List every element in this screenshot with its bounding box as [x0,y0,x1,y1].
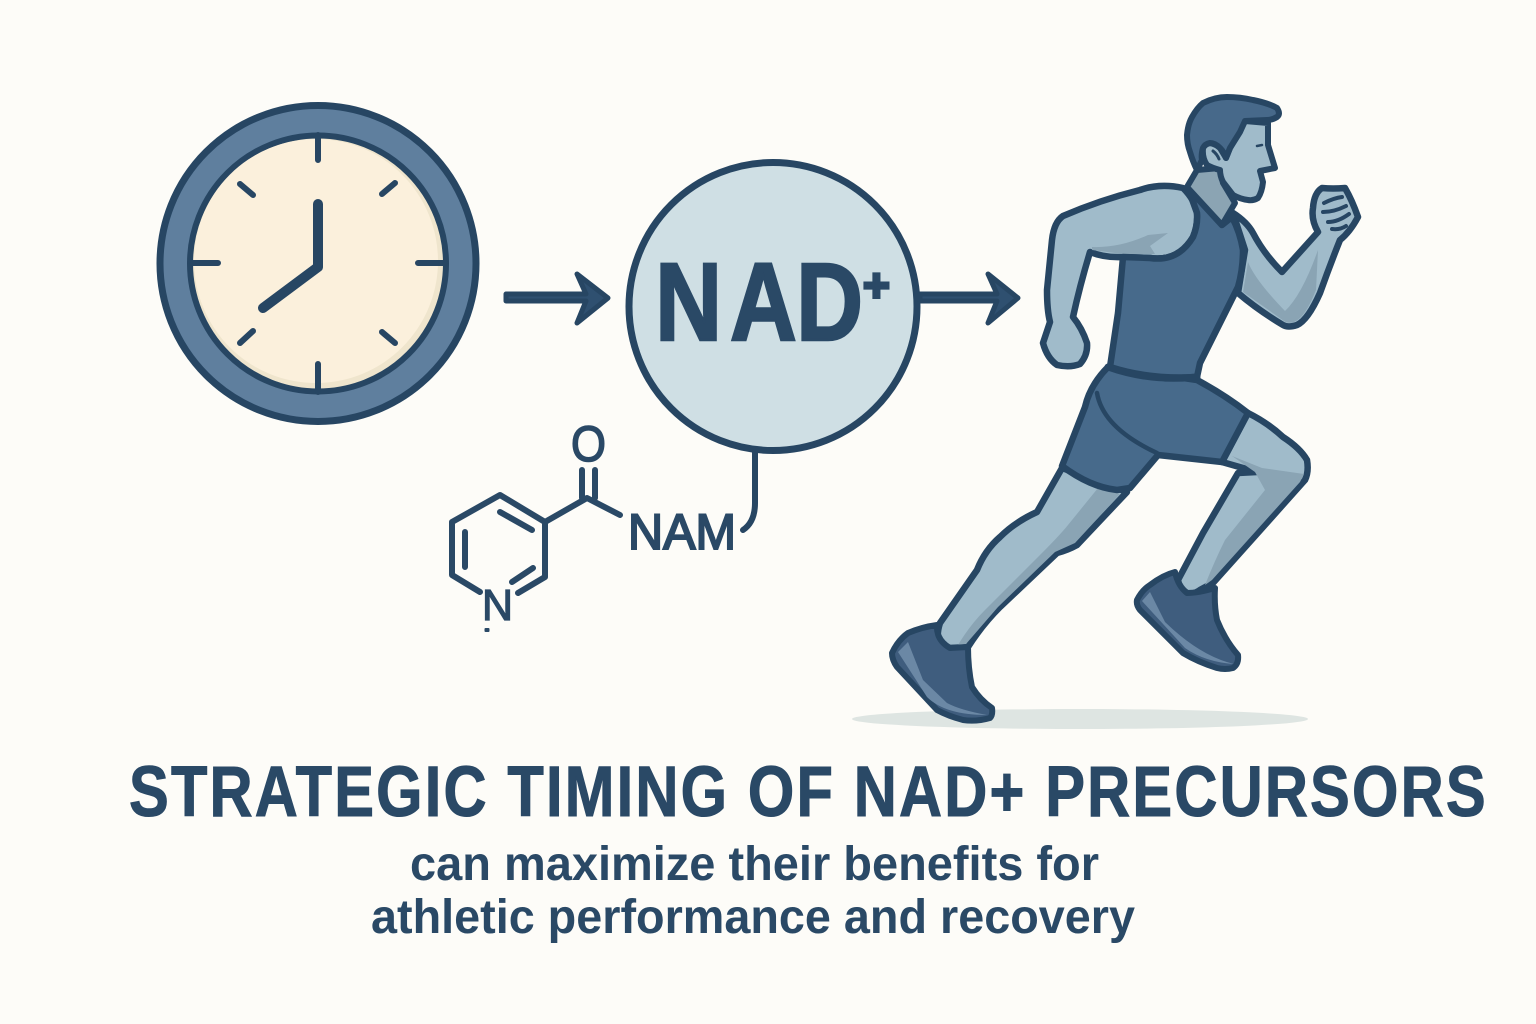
molecule: nicotinamide (NAM): N [482,581,513,630]
subtitle: athletic performance and recovery [371,891,1135,944]
NAD+ circle: + [863,259,890,311]
far shoe [1137,572,1238,669]
ground shadow [852,709,1308,729]
far arm [1233,188,1358,326]
shorts [1062,367,1248,490]
molecule: nicotinamide (NAM) [452,416,736,632]
face [1203,121,1275,200]
molecule: nicotinamide (NAM): NAM [628,504,736,560]
icon: clock [160,106,476,422]
far leg [938,468,1127,648]
molecule: nicotinamide (NAM): O [571,416,606,472]
near arm [1043,186,1197,366]
arrow: NAD+ to athlete [920,274,1018,323]
arrow: clock to NAD+ [506,274,608,323]
hair [1187,97,1279,170]
title: STRATEGIC TIMING OF NAD+ PRECURSORS [129,752,1486,831]
near leg [1178,413,1308,594]
subtitle [371,838,1135,944]
near shoe [892,625,992,721]
NAD+ circle: NAD [655,240,863,364]
connector line: NAD+ to NAM [743,452,755,530]
tank top [1108,188,1243,378]
subtitle: can maximize their benefits for [410,838,1099,891]
neck [1187,168,1235,225]
NAD+ circle [629,162,917,450]
icon: running athlete [892,97,1358,721]
